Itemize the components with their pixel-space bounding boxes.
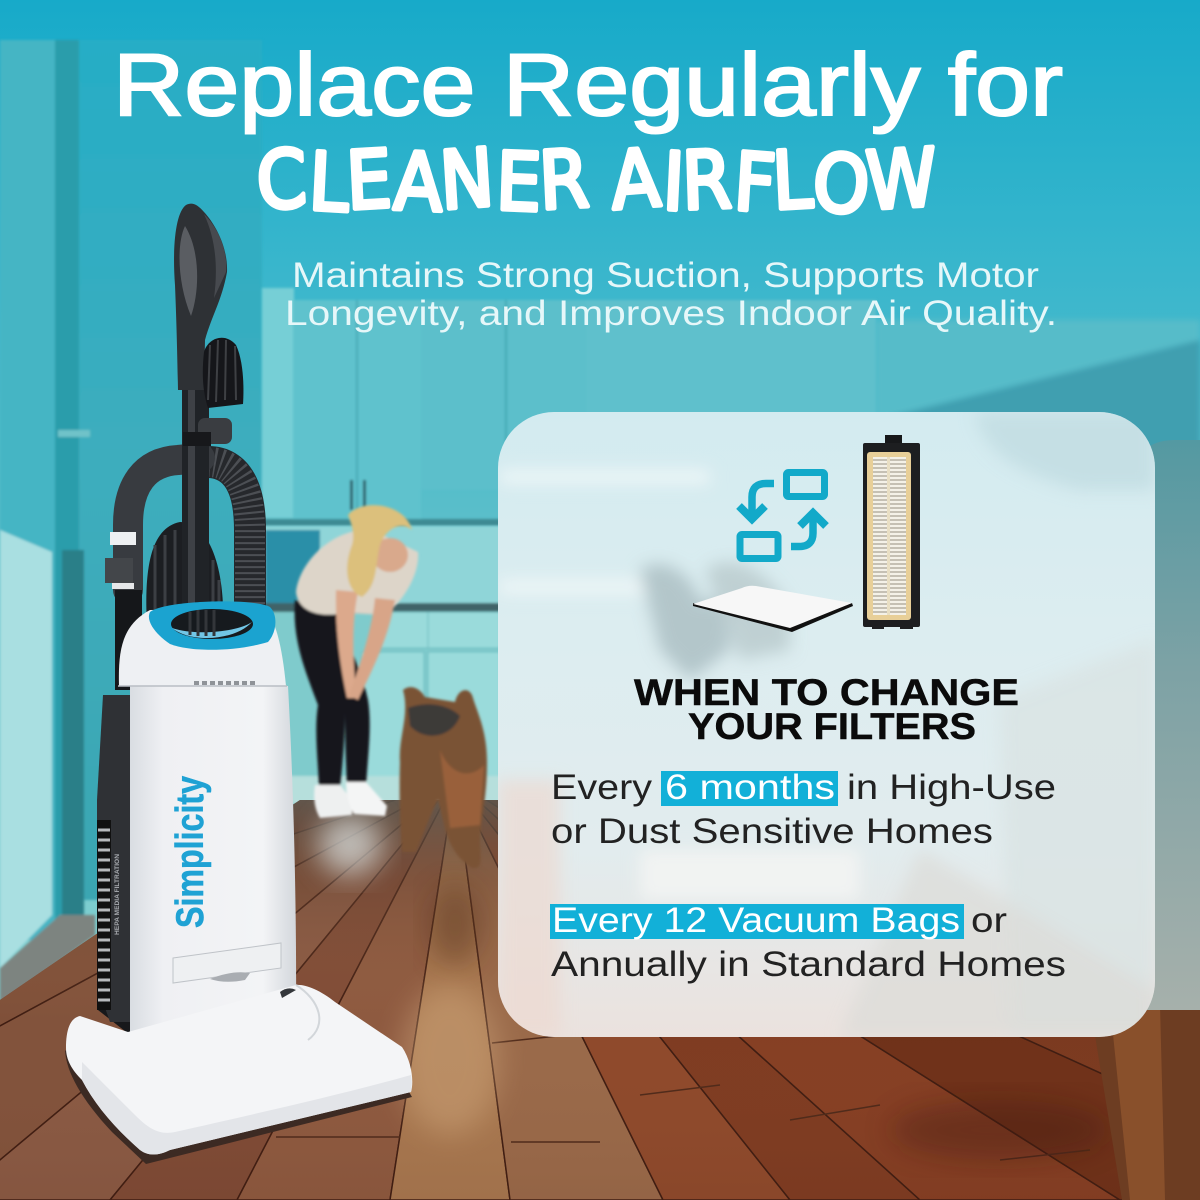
heading: when to change your filters <box>634 672 1019 747</box>
vacuum hose and cord storage <box>105 458 250 690</box>
vacuum brand name: Simplicity <box>169 776 212 928</box>
text block: six month schedule: 6 months <box>665 768 835 807</box>
vacuum side panel <box>97 695 130 1035</box>
headline: Replace Regularly for Cleaner Airflow <box>113 35 1063 230</box>
text block: twelve bag schedule: Every 12 Vacuum Bags <box>552 901 960 940</box>
text block: twelve bag schedule: Annually in Standard Homes <box>551 945 1066 984</box>
left door and frame <box>0 40 262 1005</box>
panel: when to change your filters <box>498 412 1155 1037</box>
vacuum white body <box>118 601 296 1040</box>
text block: six month schedule: or Dust Sensitive Homes <box>551 812 993 851</box>
icon: flat white foam filter <box>693 586 853 632</box>
heading: when to change your filters: YOUR FILTERS <box>688 706 976 747</box>
text block: six month schedule: in High-Use <box>847 768 1056 807</box>
vacuum floor head <box>65 985 412 1164</box>
heading line one: Replace Regularly for <box>113 35 1063 134</box>
person bending over <box>295 505 418 818</box>
subtitle <box>285 255 1057 333</box>
vacuum door latch <box>173 943 281 983</box>
kitchen backsplash and lower cabinets <box>262 526 502 804</box>
text block: six month schedule: Every <box>551 768 653 807</box>
subtitle: Maintains Strong Suction, Supports Motor <box>292 255 1039 295</box>
ceiling and right wall <box>875 320 1200 800</box>
text block: twelve bag schedule: or <box>971 901 1007 940</box>
text block: six month schedule <box>551 768 1056 851</box>
vacuum crevice brush attachment <box>183 338 243 446</box>
icon: swap filters arrows <box>739 472 826 558</box>
sofa arm with wooden leg <box>1080 440 1200 1200</box>
wooden floor planks <box>0 800 1122 1200</box>
vacuum side panel: HEPA MEDIA FILTRATION <box>114 854 121 935</box>
heading: when to change your filters: WHEN TO CHANGE <box>634 672 1019 713</box>
dog <box>400 687 487 868</box>
text block: twelve bag schedule <box>550 901 1066 984</box>
vacuum pole and handle <box>174 204 227 645</box>
subtitle: Longevity, and Improves Indoor Air Quality. <box>285 293 1057 333</box>
blurred room seen through the panel <box>498 412 1155 1037</box>
upper kitchen cabinets <box>262 288 876 526</box>
icon: HEPA pleated filter <box>863 435 920 629</box>
